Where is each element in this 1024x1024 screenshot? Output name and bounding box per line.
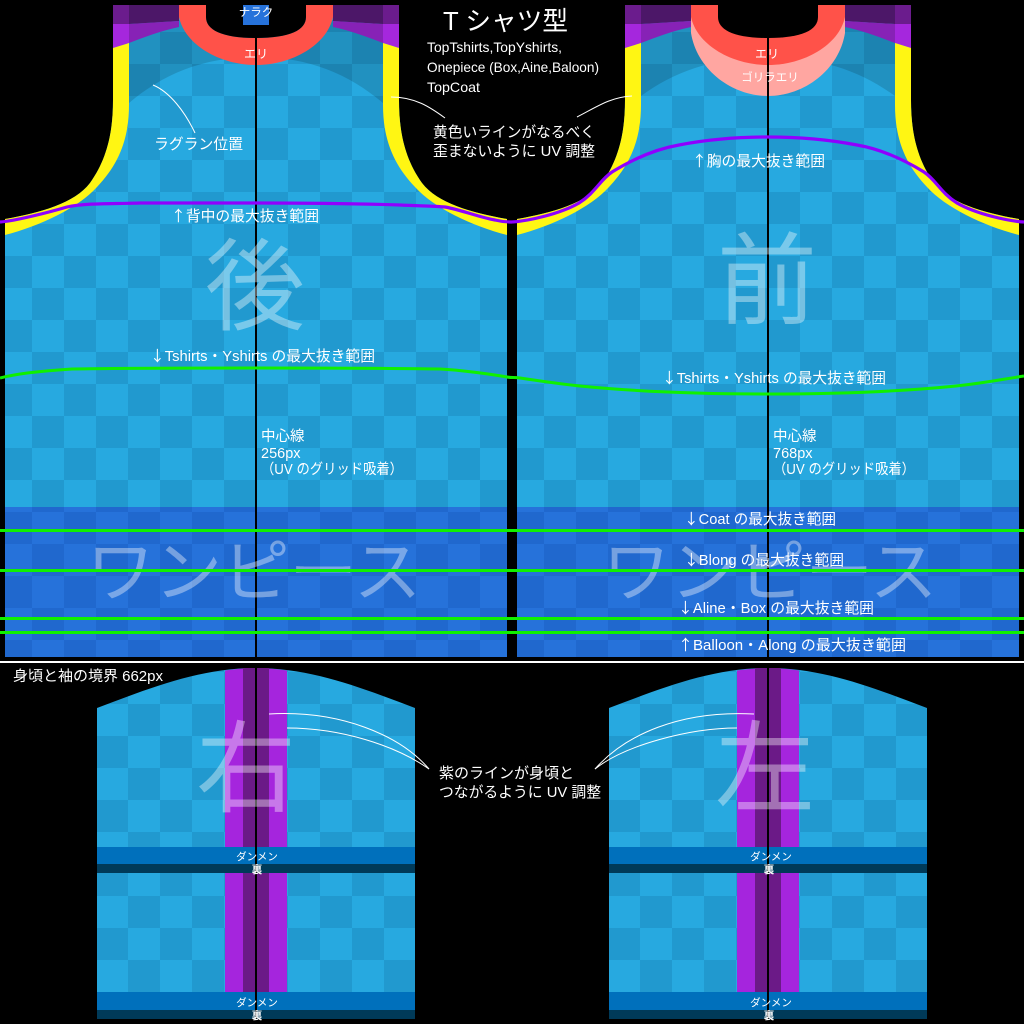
back raglan shaded area [129, 20, 383, 103]
boundary label: 身頃と袖の境界 662px [13, 668, 164, 685]
left sleeve purple stripes [737, 668, 799, 992]
panel: front body [517, 5, 1019, 657]
chest max label: ↑胸の最大抜き範囲 [692, 150, 825, 171]
back center note: 256px [261, 446, 301, 462]
front body cloth [517, 5, 1019, 657]
watermark front: 前 [717, 226, 817, 338]
back max-cut purple line [0, 203, 512, 222]
gorilla collar [691, 5, 845, 96]
right sleeve cloth upper [97, 668, 415, 847]
front neck hole [718, 5, 818, 38]
small part labels: ゴリラエリ [741, 70, 799, 84]
purple line note [439, 765, 601, 801]
small part labels: エリ [244, 47, 268, 61]
watermark back: 後 [205, 232, 305, 344]
hem labels: ダンメン [236, 850, 278, 863]
large watermark labels [86, 226, 938, 826]
right sleeve hem bands [97, 847, 415, 1019]
hem labels: 裏 [252, 863, 263, 876]
shirt max label front: ↓Tshirts・Yshirts の最大抜き範囲 [662, 367, 886, 388]
watermark onepiece front: ワンピース [602, 535, 938, 611]
front center note: 中心線 [773, 428, 817, 445]
purple line note: つながるように UV 調整 [439, 784, 601, 801]
small part labels: エリ [755, 47, 779, 61]
yellow line note: 歪まないように UV 調整 [433, 143, 595, 160]
raglan label: ラグラン位置 [154, 136, 243, 153]
type list [427, 39, 599, 95]
coat label: ↓Coat の最大抜き範囲 [684, 508, 836, 529]
watermark right: 右 [196, 714, 296, 826]
back max label: ↑背中の最大抜き範囲 [171, 205, 319, 226]
left sleeve center line [767, 668, 769, 1019]
aline label: ↓Aline・Box の最大抜き範囲 [678, 597, 874, 618]
yellow line note [433, 124, 595, 160]
front center note: （UV のグリッド吸着） [773, 461, 915, 478]
back shoulder purple strips [113, 5, 399, 48]
back center note [261, 428, 403, 478]
front onepiece band [517, 507, 1019, 657]
small part labels [239, 6, 799, 84]
back onepiece band [5, 507, 507, 657]
front shoulder purple strips [625, 5, 911, 48]
balloon label: ↑Balloon・Along の最大抜き範囲 [678, 634, 906, 655]
hem labels: 裏 [252, 1009, 263, 1022]
hem labels [236, 850, 792, 1022]
front center note [773, 428, 915, 478]
hem labels: 裏 [764, 863, 775, 876]
front yellow armhole lines [517, 43, 1019, 235]
watermark left: 左 [715, 714, 815, 826]
type list: TopTshirts,TopYshirts, [427, 39, 562, 55]
purple line note: 紫のラインが身頃と [439, 765, 574, 782]
back center note: （UV のグリッド吸着） [261, 461, 403, 478]
coat line [0, 529, 1024, 532]
yellow line note: 黄色いラインがなるべく [433, 124, 595, 141]
right sleeve cloth lower [97, 873, 415, 992]
back neck hole [206, 5, 306, 38]
blong line [0, 569, 1024, 572]
small part labels: ナラク [239, 6, 273, 19]
hem labels: ダンメン [236, 996, 278, 1009]
right sleeve center line [255, 668, 257, 1019]
hem labels: ダンメン [750, 850, 792, 863]
green wave line [0, 368, 1024, 394]
callout leaders [153, 85, 754, 769]
panel: left sleeve [609, 668, 927, 1019]
hem labels: 裏 [764, 1009, 775, 1022]
front center line [767, 38, 769, 657]
divider [0, 661, 1024, 663]
back yellow armhole lines [5, 43, 507, 235]
left sleeve cloth upper [609, 668, 927, 847]
left sleeve hem bands [609, 847, 927, 1019]
watermark onepiece back: ワンピース [86, 535, 422, 611]
aline line [0, 617, 1024, 620]
title: T シャツ型 [443, 6, 568, 36]
type list: Onepiece (Box,Aine,Baloon) [427, 59, 599, 75]
back body cloth [5, 5, 507, 657]
front center note: 768px [773, 446, 813, 462]
left sleeve cloth lower [609, 873, 927, 992]
panel: back body [5, 5, 507, 657]
blong label: ↓Blong の最大抜き範囲 [684, 549, 844, 570]
right sleeve purple stripes [225, 668, 287, 992]
back center line [255, 38, 257, 657]
hem labels: ダンメン [750, 996, 792, 1009]
balloon line [0, 631, 1024, 634]
back center note: 中心線 [261, 428, 305, 445]
back collar [179, 5, 333, 65]
naraku block [243, 5, 269, 25]
type list: TopCoat [427, 79, 480, 95]
shirt max label back: ↓Tshirts・Yshirts の最大抜き範囲 [150, 345, 375, 366]
front max-cut purple line [512, 137, 1024, 222]
front collar [691, 5, 845, 65]
panel: right sleeve [97, 668, 415, 1019]
front raglan shaded area [641, 20, 895, 96]
